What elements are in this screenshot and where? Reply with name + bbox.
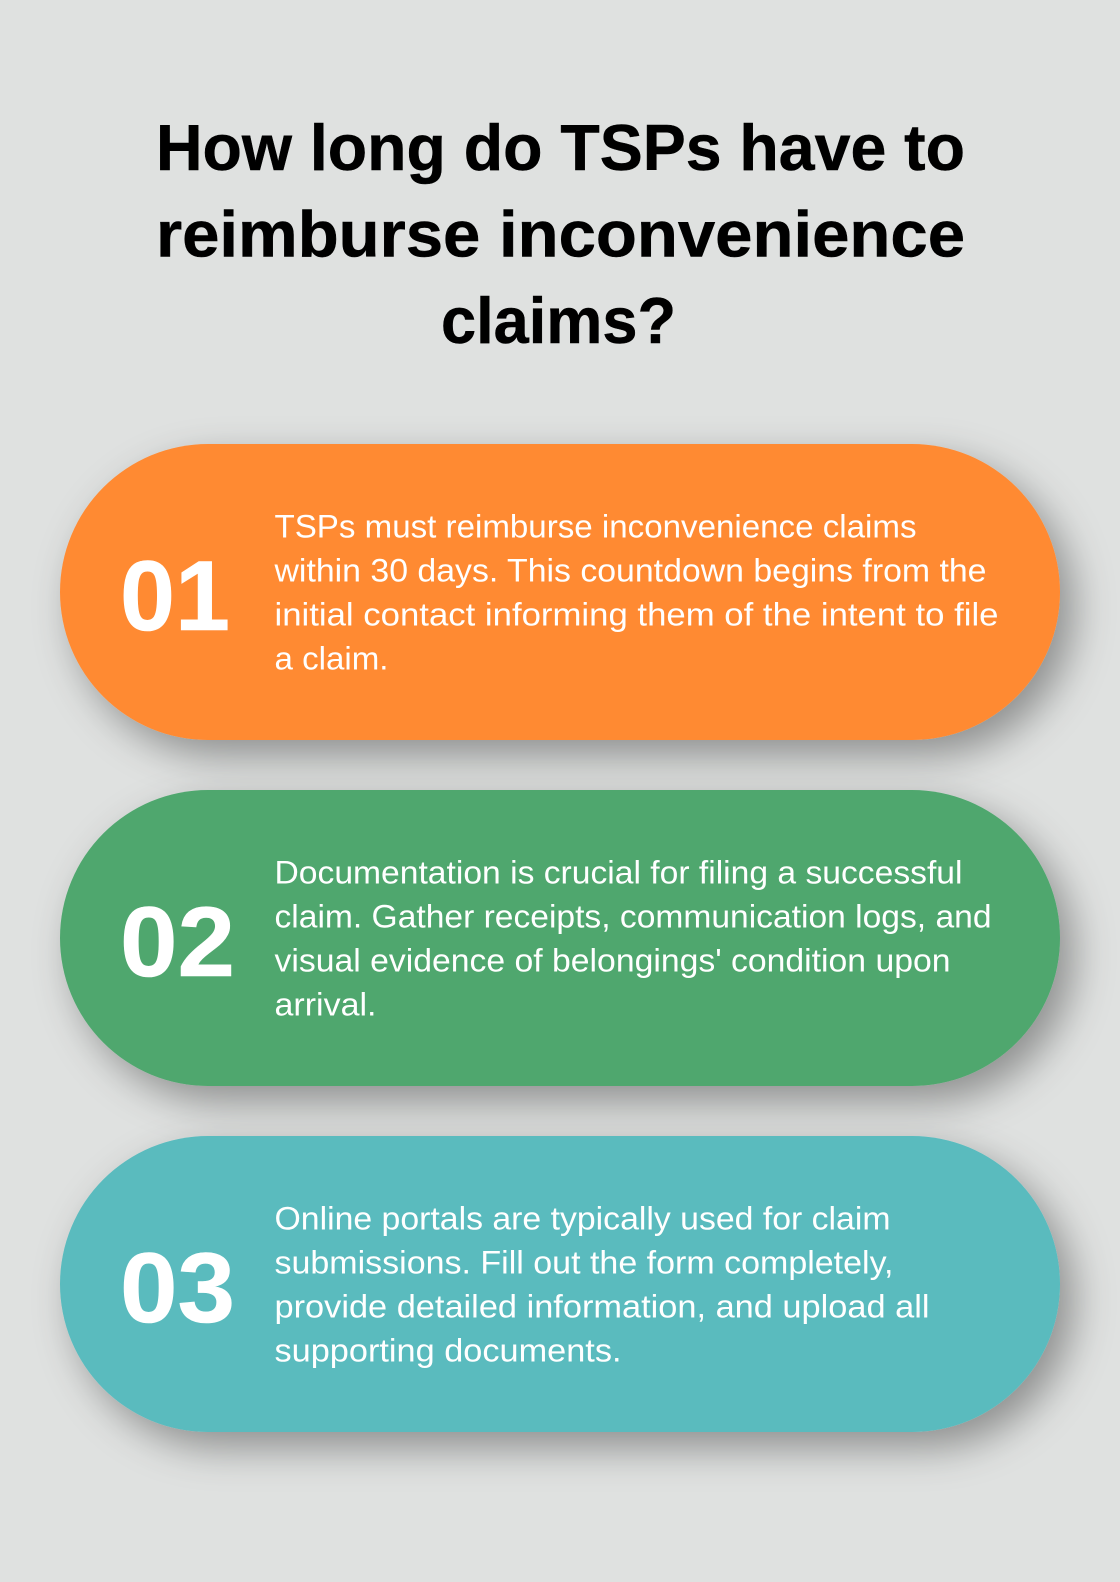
text block: step 02: Documentation is crucial for filing a successful <box>274 854 962 890</box>
text block: step 03: Online portals are typically used for claim <box>274 1200 890 1236</box>
title <box>156 111 965 357</box>
text block: step 03: provide detailed information, and upload all <box>274 1288 930 1324</box>
text block: step 02: claim. Gather receipts, communication logs, and <box>274 898 992 934</box>
number 03: 03 <box>120 1232 235 1343</box>
text block: step 01: a claim. <box>274 640 388 676</box>
pill: teal <box>60 1136 1060 1432</box>
number 01: 01 <box>120 540 230 651</box>
text block: step 02 <box>274 854 992 1022</box>
text block: step 01: initial contact informing them of the intent to file <box>274 596 998 632</box>
text block: step 02: visual evidence of belongings' condition upon <box>274 942 950 978</box>
panel: step 01 <box>60 444 1060 740</box>
title: How long do TSPs have to <box>156 111 965 184</box>
text block: step 03: submissions. Fill out the form completely, <box>274 1244 894 1280</box>
panel: step 02 <box>60 790 1060 1086</box>
title: reimburse inconvenience <box>156 198 965 270</box>
title: claims? <box>441 284 676 357</box>
number 02: 02 <box>120 886 235 997</box>
text block: step 02: arrival. <box>274 986 376 1022</box>
text block: step 03 <box>274 1200 930 1368</box>
text block: step 01: within 30 days. This countdown begins from the <box>273 552 986 588</box>
text block: step 01: TSPs must reimburse inconvenience claims <box>274 508 916 544</box>
pill: green <box>60 790 1060 1086</box>
pill: orange <box>60 444 1060 740</box>
panel: step 03 <box>60 1136 1060 1432</box>
text block: step 03: supporting documents. <box>274 1332 622 1368</box>
text block: step 01 <box>273 508 998 676</box>
